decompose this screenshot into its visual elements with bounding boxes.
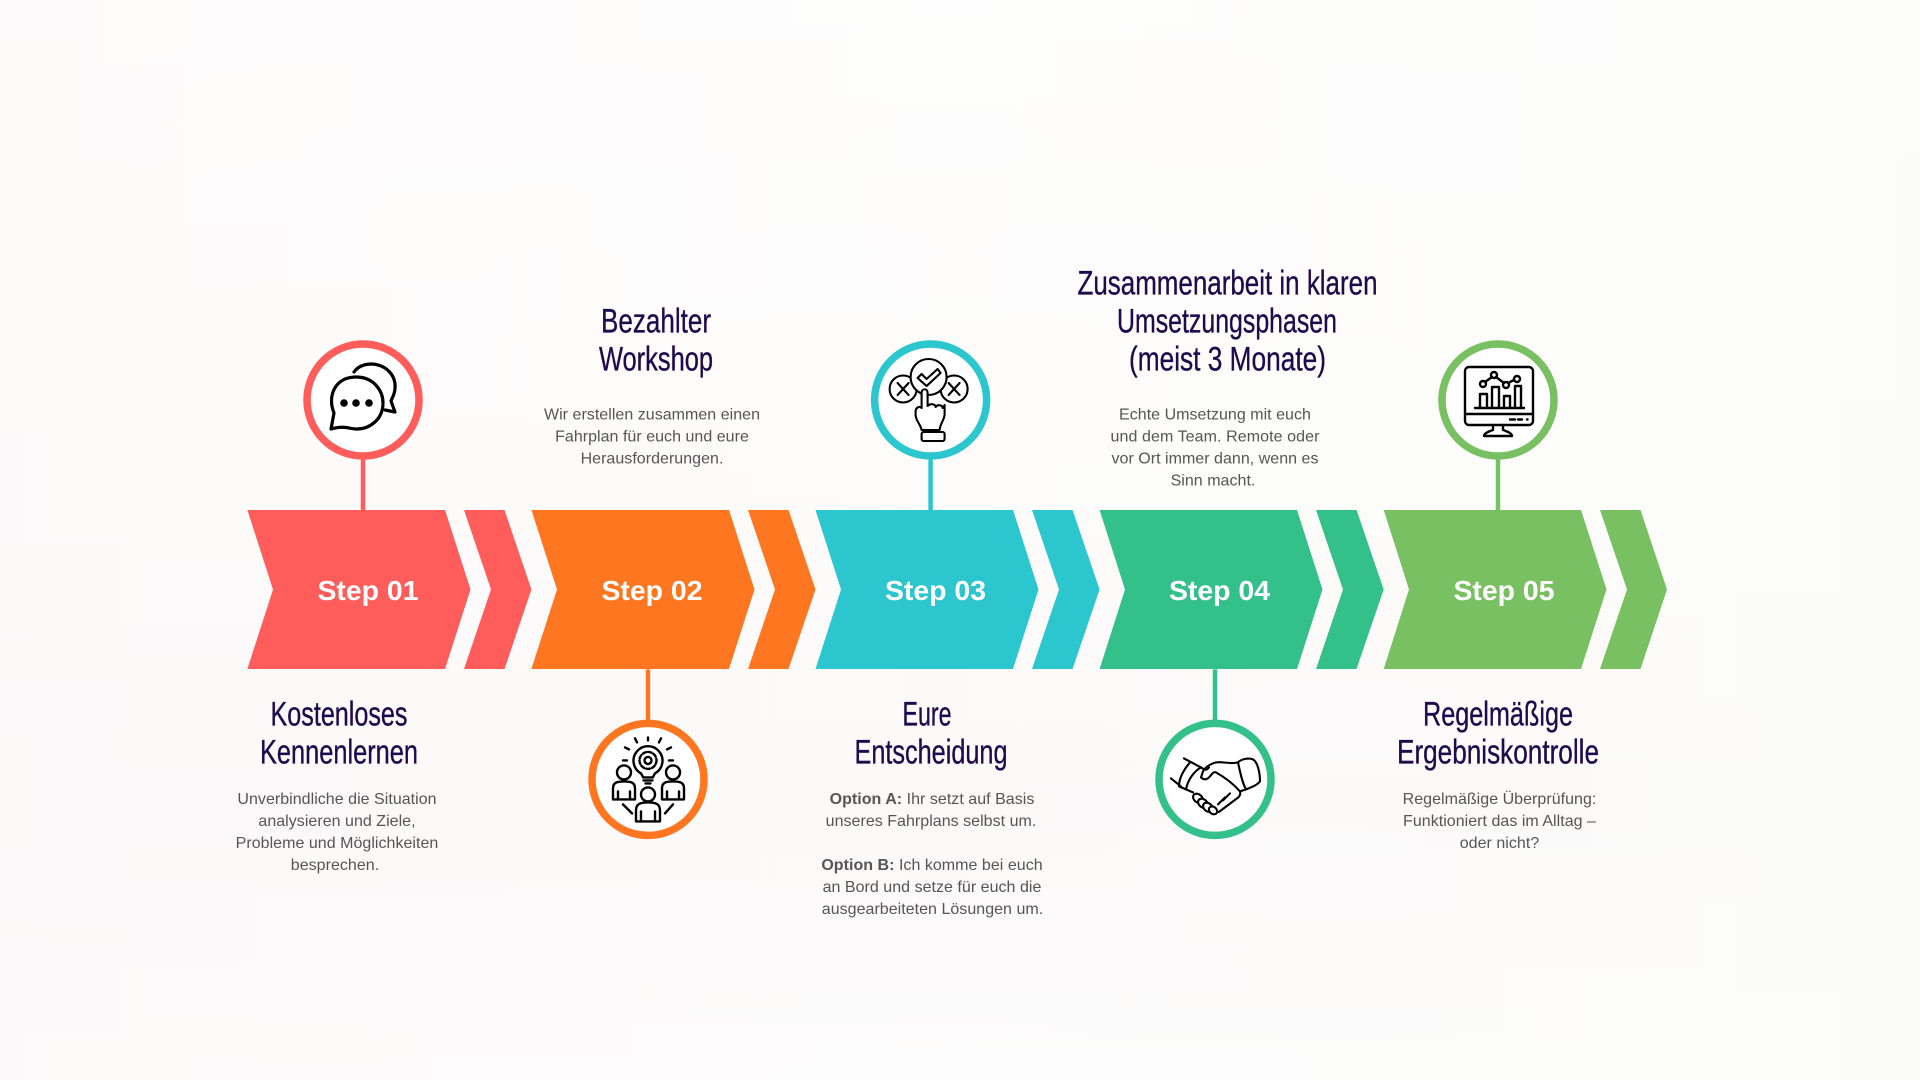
text: step 04 description: vor Ort immer dann, wenn es <box>1112 450 1318 468</box>
step 01 chevrons: Step 01 <box>318 575 418 606</box>
text: step 04 description: Echte Umsetzung mit euch <box>1119 406 1311 424</box>
text: step 05 description: oder nicht? <box>1460 835 1539 852</box>
step 02 chevrons: Step 02 <box>602 575 702 606</box>
text: step 04 description <box>1110 406 1320 490</box>
heading: Kostenloses Kennenlernen <box>260 696 418 772</box>
heading: Eure Entscheidung: Eure <box>902 696 952 734</box>
heading: Eure Entscheidung: Entscheidung <box>854 734 1008 772</box>
text: step 04 description: Sinn macht. <box>1171 472 1255 490</box>
icon: handshake in circle (step 04) <box>1159 669 1271 835</box>
heading: Regelmäßige Ergebniskontrolle <box>1397 696 1599 772</box>
heading: Zusammenarbeit in klaren Umsetzungsphasen <box>1078 264 1378 378</box>
heading: Zusammenarbeit in klaren Umsetzungsphasen: Zusammenarbeit in klaren <box>1078 264 1378 302</box>
text: step 05 description: Regelmäßige Überprüfung: <box>1403 790 1596 808</box>
text: step 02 description <box>544 406 760 468</box>
heading: Zusammenarbeit in klaren Umsetzungsphasen: Umsetzungsphasen <box>1117 302 1337 340</box>
text: step 05 description <box>1403 790 1596 852</box>
text: step 01 description: analysieren und Ziele, <box>258 813 416 830</box>
heading: Kostenloses Kennenlernen: Kennenlernen <box>260 734 418 772</box>
step 04 chevrons <box>1100 510 1384 669</box>
icon: chat bubbles in circle (step 01) <box>307 344 419 510</box>
step 05 chevrons: Step 05 <box>1454 575 1554 606</box>
text: step 03 description: Option B: Ich komme bei euch <box>821 857 1043 874</box>
icon: pointing hand choosing check in circle (step 03) <box>875 344 987 510</box>
text: step 04 description: und dem Team. Remote oder <box>1110 428 1320 446</box>
heading: Regelmäßige Ergebniskontrolle: Regelmäßige <box>1423 696 1573 734</box>
text: step 01 description: Unverbindliche die Situation <box>237 791 437 808</box>
text: step 02 description: Fahrplan für euch und eure <box>555 428 749 446</box>
icon: monitor with chart in circle (step 05) <box>1442 344 1554 510</box>
icon: team with light bulb in circle (step 02) <box>592 669 704 835</box>
step 03 chevrons <box>816 510 1100 669</box>
heading: Eure Entscheidung <box>854 696 1008 772</box>
text: step 02 description: Herausforderungen. <box>581 450 723 468</box>
step 03 chevrons: Step 03 <box>885 575 986 606</box>
text: step 01 description: Probleme und Möglichkeiten <box>236 835 438 852</box>
text: step 03 description: unseres Fahrplans selbst um. <box>826 813 1036 830</box>
text: step 03 description: ausgearbeiteten Lösungen um. <box>822 901 1043 918</box>
heading: Bezahlter Workshop: Workshop <box>599 340 713 378</box>
heading: Zusammenarbeit in klaren Umsetzungsphasen: (meist 3 Monate) <box>1129 340 1326 378</box>
text: step 05 description: Funktioniert das im Alltag – <box>1403 813 1596 830</box>
text: step 01 description: besprechen. <box>291 857 379 874</box>
step 05 chevrons <box>1384 510 1667 669</box>
text: step 03 description: an Bord und setze für euch die <box>823 879 1041 896</box>
heading: Bezahlter Workshop <box>599 302 713 378</box>
text: step 02 description: Wir erstellen zusammen einen <box>544 406 760 424</box>
step 02 chevrons <box>531 510 816 669</box>
step 04 chevrons: Step 04 <box>1169 575 1270 606</box>
heading: Kostenloses Kennenlernen: Kostenloses <box>270 696 408 734</box>
heading: Regelmäßige Ergebniskontrolle: Ergebniskontrolle <box>1397 734 1599 772</box>
text: step 03 description <box>821 791 1043 918</box>
text: step 03 description: Option A: Ihr setzt auf Basis <box>830 791 1034 808</box>
text: step 01 description <box>236 791 438 874</box>
heading: Bezahlter Workshop: Bezahlter <box>601 302 711 340</box>
step 01 chevrons <box>247 510 531 669</box>
